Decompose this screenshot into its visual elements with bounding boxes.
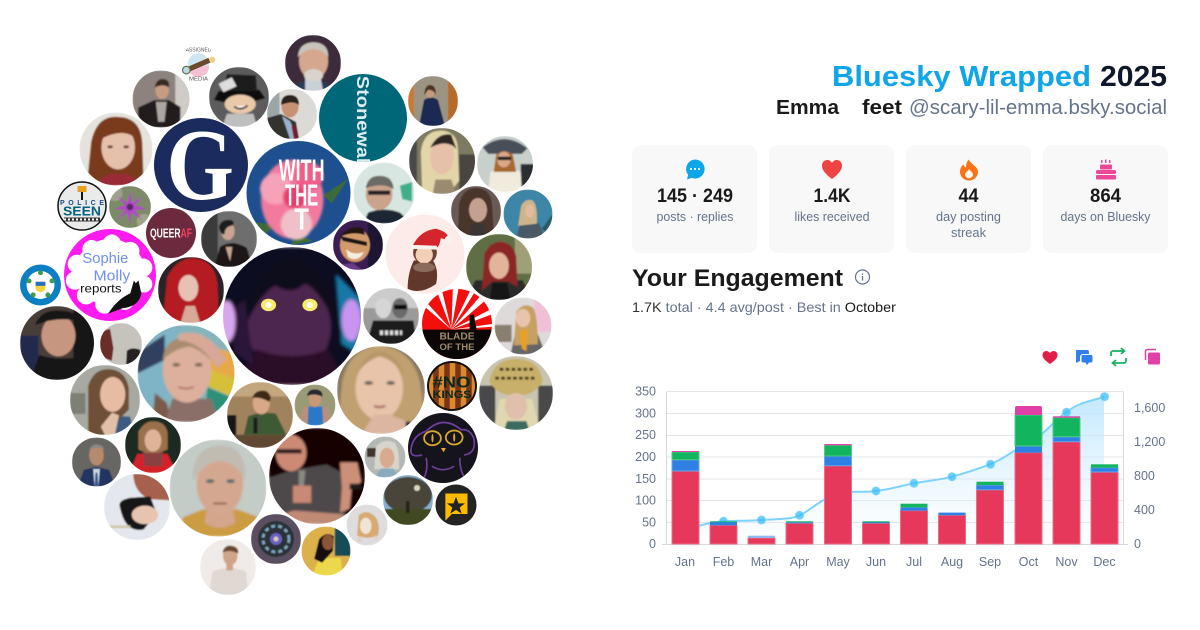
avatar: blonde woman portrait [409,128,476,194]
avatar: blonde woman close-up [337,346,425,436]
avatar: woman in red scarf [125,417,181,473]
stat card: posts and replies [632,145,757,253]
horizontal grid and axes [662,392,1128,544]
right axis labels: 0 [1134,537,1141,551]
bar: Aug [938,512,966,544]
right axis labels: 400 [1134,503,1155,517]
left axis labels: 350 [635,384,656,398]
avatar: Sophie Molly reports logo: Molly [93,269,131,285]
month labels: Dec [1093,555,1116,569]
label: posts and replies: posts · replies [656,210,734,224]
value: streak: 44 [958,186,979,207]
label: likes received: likes received [794,210,870,224]
avatar: man in dark jacket [132,70,192,128]
icon: speech bubble [686,159,705,180]
avatar: mandala pattern [251,514,301,564]
right axis labels: 1,600 [1134,401,1165,415]
bar: Mar [748,536,775,544]
month labels: Nov [1055,555,1078,569]
avatar: man in white t-shirt [200,539,256,595]
avatar: hamster [346,504,388,546]
avatar: Assigned Media logo: ASSIGNED [186,47,212,53]
avatar: figure in golden headdress [479,356,553,430]
profile name and handle [776,97,1167,119]
bar: May [824,444,852,544]
right axis labels [1134,401,1165,551]
avatar: older man with white beard [285,35,341,91]
avatar: purple line-art cat with glasses [408,413,478,483]
icon: info [856,270,870,284]
avatar: woman with rainbow flag [138,325,236,422]
avatar: Assigned Media logo: MEDIA [189,77,209,83]
month labels: May [826,555,851,569]
title: Bluesky Wrapped [832,61,1091,93]
bar: Apr [786,521,813,544]
engagement summary text: 1.7K total · 4.4 avg/post · Best in October [632,299,896,315]
avatar: Police Seen logo: POLICE [60,200,104,207]
avatar: black and white couple [363,288,419,344]
icon: birthday cake [1096,160,1116,180]
left axis labels [635,384,656,551]
avatar: woman with vivid red curls [158,257,224,323]
icon: heart [822,160,842,179]
avatar: person in blue vest [294,384,336,426]
month labels: Sep [979,555,1001,569]
avatar: Ukraine rose badge [20,264,61,306]
avatar: smiling man with glasses, purple tint [333,220,383,270]
month labels: Jun [866,555,886,569]
left axis labels: 50 [642,516,656,530]
avatar: Sophie Molly reports logo: Sophie [82,251,128,267]
avatar: man with dark glasses [354,162,414,224]
avatar: woman with auburn hair [80,112,152,186]
avatar: Police Seen logo: SEEN [63,204,101,218]
cumulative line [685,397,1104,529]
bar: Jul [900,504,928,544]
avatar: No Kings badge: #NO [432,374,470,392]
avatar: Stonewall logo [319,74,407,169]
cumulative area [685,397,1104,544]
avatar: With The T podcast rose [246,141,350,245]
label: day posting streak: streak [951,226,987,240]
month labels: Mar [751,555,772,569]
bar: Dec [1091,464,1118,544]
avatar: woman with long dark hair and glasses [451,186,501,236]
left axis labels: 300 [635,406,656,420]
avatar: With The T podcast rose: THE [285,179,318,212]
left axis labels: 0 [649,537,656,551]
value: likes: 1.4K [814,186,851,207]
profile name and handle: feet [862,97,902,119]
avatar: Sophie Molly reports logo [64,229,156,321]
avatar: woman with braids in yellow [302,526,350,576]
month labels: Oct [1019,555,1039,569]
left axis labels: 100 [635,494,656,508]
month labels: Jan [675,555,695,569]
label: days on Bluesky: days on Bluesky [1060,210,1151,224]
bar: Sep [976,482,1004,544]
chart legend icons [1042,348,1160,366]
avatar: purple flower [107,186,152,229]
avatar: man in black t-shirt [20,306,95,380]
avatar: chibi cat in santa hat [386,214,464,294]
avatar: panelist speaking at microphone [227,382,293,448]
avatar: red-haired woman smiling [466,234,535,300]
bar: Feb [710,521,737,544]
avatar: No Kings badge: KINGS [432,389,472,401]
avatar: tree in park [383,475,433,525]
month labels: Feb [713,555,734,569]
bar: Jan [672,451,699,544]
avatar: Stonewall logo: Stonewall [353,76,373,169]
avatar: yellow star speech badge [436,484,476,526]
avatar: upside-down woman [104,474,170,540]
avatar: woman with glasses and colourful scarf [494,298,552,354]
stat card: likes received [769,145,894,253]
avatar: man in blue suit [72,438,121,486]
avatar: With The T podcast rose: T [294,203,309,236]
icon: quotes legend [1146,350,1160,364]
avatar: Sophie Molly reports logo: reports [80,281,122,295]
chart: monthly engagement bars with cumulative line [635,384,1165,569]
bar: Nov [1053,416,1080,544]
avatar: Blade of the red sunburst: BLADE [440,331,475,342]
stat card: days on Bluesky [1043,145,1168,253]
avatar: older man with grey hair [170,440,266,536]
avatar: press cartoon [209,67,269,127]
label: day posting streak: day posting [936,210,1001,224]
value: posts and replies: 145 · 249 [657,186,733,207]
avatar: woman in navy dress [408,76,458,126]
month labels: Jul [906,555,922,569]
panel: avatar bubble cluster [20,35,553,595]
icon: likes legend [1042,351,1058,364]
avatar: smiling older woman [364,436,406,478]
avatar: No Kings badge [427,361,477,411]
icon: replies legend [1076,350,1092,365]
left axis labels: 150 [635,472,656,486]
avatar: QueerAF logo [146,208,196,258]
title: 2025 [1100,61,1167,93]
avatar: anime character with glowing eyes [219,247,364,385]
cumulative points [720,393,1108,525]
avatar: Assigned Media logo [182,48,216,80]
avatar: woman with long brown hair, denim [70,365,140,435]
month labels [675,555,1116,569]
left axis labels: 200 [635,450,656,464]
avatar: woman in sunglasses with drink [477,136,534,192]
avatar: Blade of the red sunburst: OF THE [440,342,474,352]
profile name and handle: Emma [776,97,840,119]
avatar: bald man with microphone [269,428,365,524]
avatar: QueerAF logo: QUEERAF [150,226,192,240]
avatar: With The T podcast rose: WITH [279,155,324,188]
avatar: man in suit with red tie [267,89,317,139]
bar: Jun [862,521,890,544]
month labels: Aug [941,555,963,569]
stat card: posting streak [906,145,1031,253]
left axis labels: 250 [635,428,656,442]
avatar: Guardian logo: G [166,109,234,221]
avatar: dark-haired woman in black [201,211,257,267]
icon: reposts legend [1111,348,1126,366]
right axis labels: 1,200 [1134,435,1165,449]
heading: Your Engagement: Your Engagement [632,265,843,292]
month labels: Apr [790,555,809,569]
bar: Oct [1015,406,1042,544]
avatar: Police Seen logo [57,181,107,231]
avatar: blonde woman against blue wall [504,190,552,238]
right axis labels: 800 [1134,469,1155,483]
label: day posting streak [936,210,1001,240]
icon: flame [960,160,978,180]
avatar: grey abstract photo [100,323,142,365]
avatar: Blade of the red sunburst [422,289,492,359]
value: days: 864 [1090,186,1121,207]
profile name and handle: @scary-lil-emma.bsky.social [909,97,1167,119]
